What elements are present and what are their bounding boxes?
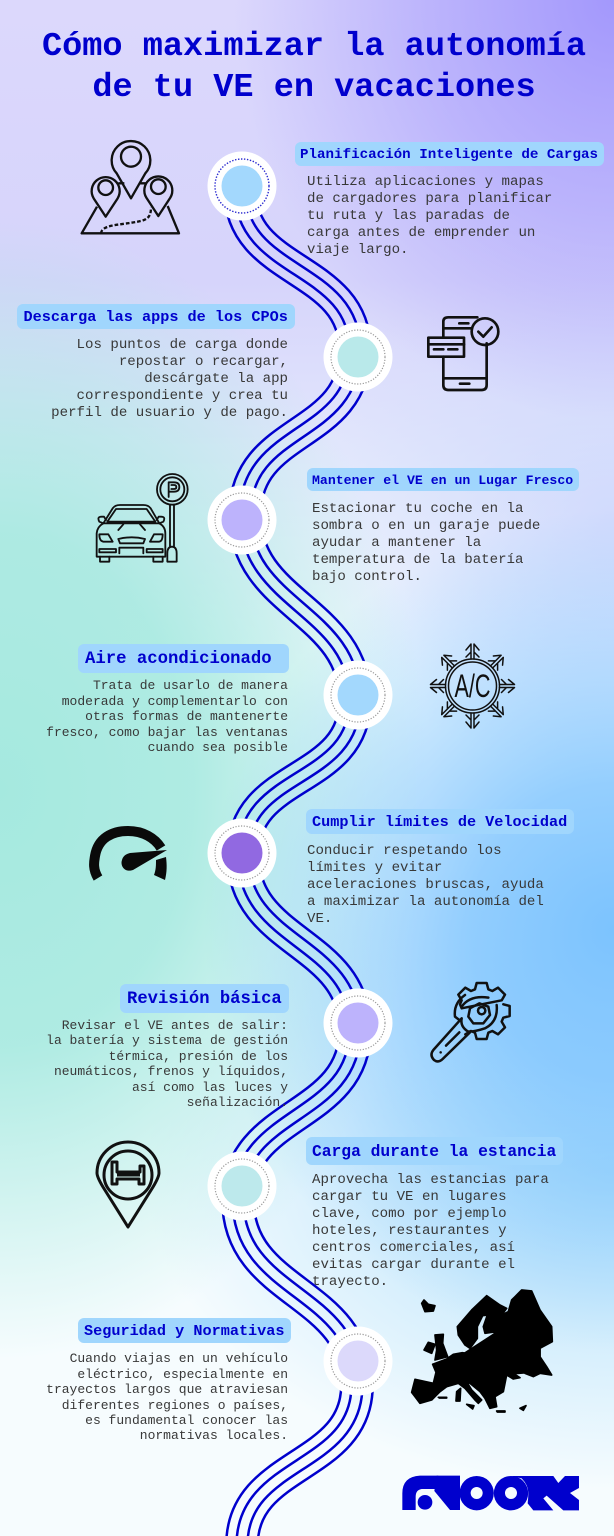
text block: evitas cargar durante el (312, 1256, 515, 1272)
text block: térmica, presión de los (109, 1049, 288, 1064)
text block: bajo control. (312, 568, 422, 584)
title (42, 28, 586, 107)
text block: es fundamental conocer las (85, 1413, 288, 1428)
icon: map of Europe (412, 1290, 552, 1412)
heading (78, 1318, 291, 1343)
icon: A/C snowflake: A/C (454, 668, 490, 704)
text block: moderada y complementarlo con (62, 694, 288, 709)
text block: temperatura de la batería (312, 552, 523, 568)
text block: aceleraciones bruscas, ayuda (307, 876, 544, 892)
text block (51, 337, 288, 421)
text block (307, 842, 544, 926)
icon: A/C snowflake (430, 644, 514, 728)
step marker 8 (324, 1326, 392, 1396)
text block: diferentes regiones o países, (62, 1398, 288, 1413)
text block (312, 1172, 549, 1290)
text block: carga antes de emprender un (307, 224, 535, 240)
text block: así como las luces y (132, 1080, 288, 1095)
icon: hotel location pin (97, 1142, 159, 1227)
heading: Revisión básica (127, 990, 282, 1009)
text block: hoteles, restaurantes y (312, 1222, 507, 1238)
icon: wrench and gear (431, 983, 510, 1061)
heading (306, 1137, 563, 1165)
text block: señalización. (187, 1095, 288, 1110)
step marker 2 (324, 322, 392, 392)
text block: trayecto. (312, 1274, 388, 1290)
text block: Revisar el VE antes de salir: (62, 1018, 288, 1033)
panel: Revisión básica (46, 984, 289, 1110)
icon: phone with card and check (428, 317, 498, 390)
text block: Aprovecha las estancias para (312, 1172, 549, 1188)
panel: Mantener el VE en un Lugar Fresco (307, 468, 579, 584)
heading: Mantener el VE en un Lugar Fresco (312, 473, 573, 488)
step marker 7 (208, 1152, 276, 1220)
text block: eléctrico, especialmente en (77, 1367, 288, 1382)
heading: Seguridad y Normativas (84, 1322, 285, 1340)
text block (46, 678, 288, 755)
text block: repostar o recargar, (119, 354, 288, 370)
heading (307, 468, 579, 491)
icon: speedometer (94, 831, 167, 880)
panel: Descarga las apps de los CPOs (17, 304, 295, 421)
panel: Cumplir límites de Velocidad (306, 809, 574, 926)
text block (46, 1351, 288, 1443)
text block: normativas locales. (140, 1428, 288, 1443)
text block: la batería y sistema de gestión (46, 1033, 288, 1048)
heading: Cumplir límites de Velocidad (312, 813, 567, 831)
text block: Conducir respetando los (307, 842, 502, 858)
heading: Descarga las apps de los CPOs (24, 308, 288, 326)
text block: viaje largo. (307, 242, 408, 258)
title: de tu VE en vacaciones (92, 69, 536, 107)
text block (307, 174, 552, 258)
heading: Aire acondicionado (85, 650, 272, 669)
text block: Cuando viajas en un vehículo (70, 1351, 288, 1366)
step marker 6 (324, 988, 392, 1058)
text block: límites y evitar (307, 860, 442, 876)
panel: Aire acondicionado (46, 644, 289, 755)
heading (120, 984, 289, 1013)
text block: trayectos largos que atraviesan (46, 1382, 288, 1397)
text block (312, 500, 540, 584)
icon: map with location pins (82, 141, 179, 233)
text block: fresco, como bajar las ventanas (46, 725, 288, 740)
text block: tu ruta y las paradas de (307, 208, 510, 224)
text block: neumáticos, frenos y líquidos, (54, 1064, 288, 1079)
text block: otras formas de mantenerte (85, 709, 288, 724)
text block: sombra o en un garaje puede (312, 518, 540, 534)
panel: Seguridad y Normativas (46, 1318, 291, 1443)
step marker 1 (208, 152, 276, 220)
text block: perfil de usuario y de pago. (51, 405, 288, 421)
text block: correspondiente y crea tu (77, 388, 288, 404)
text block: centros comerciales, así (312, 1240, 515, 1256)
logo: Floox (402, 1476, 579, 1510)
text block: Utiliza aplicaciones y mapas (307, 174, 544, 190)
text block: VE. (307, 910, 332, 926)
panel: Planificación Inteligente de Cargas (295, 142, 604, 258)
text block: Estacionar tu coche en la (312, 500, 523, 516)
text block: Trata de usarlo de manera (93, 678, 288, 693)
text block (46, 1018, 288, 1110)
panel: Carga durante la estancia (306, 1137, 563, 1290)
step marker 4 (324, 660, 392, 730)
winding road lines (222, 214, 374, 1536)
text block: de cargadores para planificar (307, 190, 552, 206)
heading (17, 304, 295, 329)
text block: Los puntos de carga donde (77, 337, 288, 353)
text block: descárgate la app (144, 371, 288, 387)
text block: a maximizar la autonomía del (307, 894, 544, 910)
title: Cómo maximizar la autonomía (42, 28, 586, 66)
heading: Carga durante la estancia (312, 1142, 556, 1161)
icon: car and parking sign (97, 474, 188, 562)
heading (295, 142, 604, 166)
heading: Planificación Inteligente de Cargas (300, 147, 598, 163)
heading (306, 809, 574, 834)
text block: cargar tu VE en lugares (312, 1188, 507, 1204)
text block: ayudar a mantener la (312, 534, 481, 550)
step marker 3 (208, 486, 276, 554)
step marker 5 (208, 818, 276, 888)
heading (78, 644, 289, 673)
text block: cuando sea posible (148, 740, 288, 755)
text block: clave, como por ejemplo (312, 1206, 507, 1222)
